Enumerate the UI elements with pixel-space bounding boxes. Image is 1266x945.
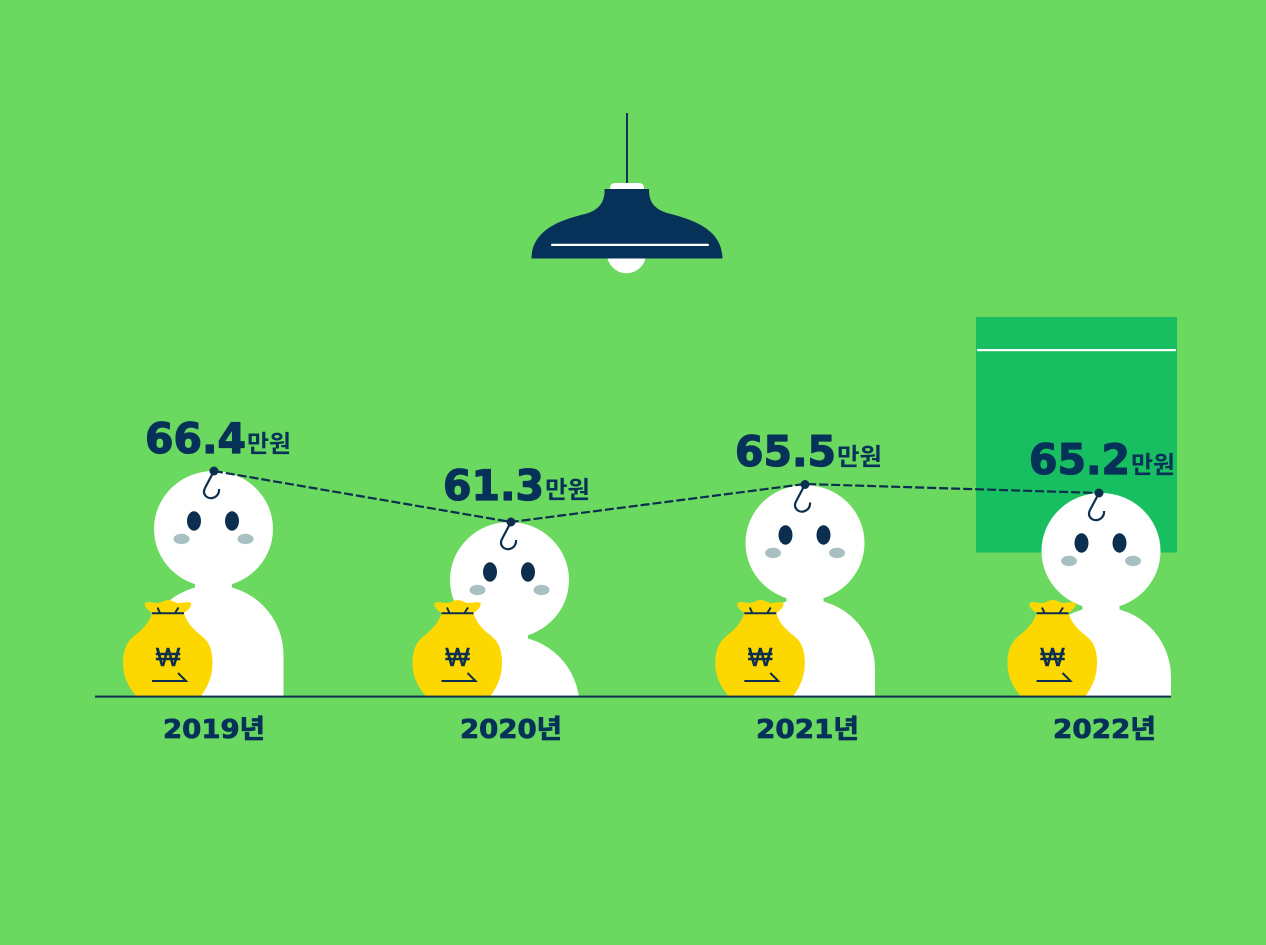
- year label 2020: 2020년: [460, 715, 562, 745]
- money bag 2019: ₩: [156, 642, 181, 672]
- year label 2021: 2021년: [756, 715, 859, 745]
- hook 2021: [795, 480, 810, 512]
- money bag 2019: [123, 600, 212, 696]
- line chart: dashed trend line: [214, 471, 1099, 522]
- character 2019: [144, 471, 284, 696]
- money bag 2022: [1008, 600, 1097, 696]
- green window: [976, 317, 1177, 552]
- money bag 2020: [412, 600, 502, 696]
- value label 2020: 61.3: [443, 461, 544, 510]
- value label 2020: 만원: [545, 477, 590, 504]
- value label 2022: 65.2: [1029, 435, 1130, 484]
- value label 2022: 만원: [1131, 452, 1175, 479]
- icon: hanging lamp: [532, 113, 722, 273]
- money bag 2020: ₩: [445, 642, 470, 672]
- money bag 2021: [715, 600, 805, 696]
- hook 2019: [204, 466, 219, 498]
- character 2022: [1042, 493, 1171, 696]
- year label 2022: 2022년: [1053, 715, 1156, 745]
- hook 2020: [501, 518, 516, 549]
- hook 2022: [1089, 488, 1104, 520]
- character 2020: [450, 522, 579, 696]
- money bag 2021: ₩: [748, 642, 773, 672]
- value label 2019: 66.4: [145, 414, 246, 463]
- value label 2021: 만원: [837, 444, 882, 471]
- money bag 2022: ₩: [1040, 642, 1065, 672]
- baseline axis: [95, 696, 1171, 698]
- character 2021: [746, 485, 875, 696]
- value label 2021: 65.5: [735, 427, 836, 476]
- value label 2019: 만원: [247, 431, 291, 458]
- year label 2019: 2019년: [163, 715, 265, 745]
